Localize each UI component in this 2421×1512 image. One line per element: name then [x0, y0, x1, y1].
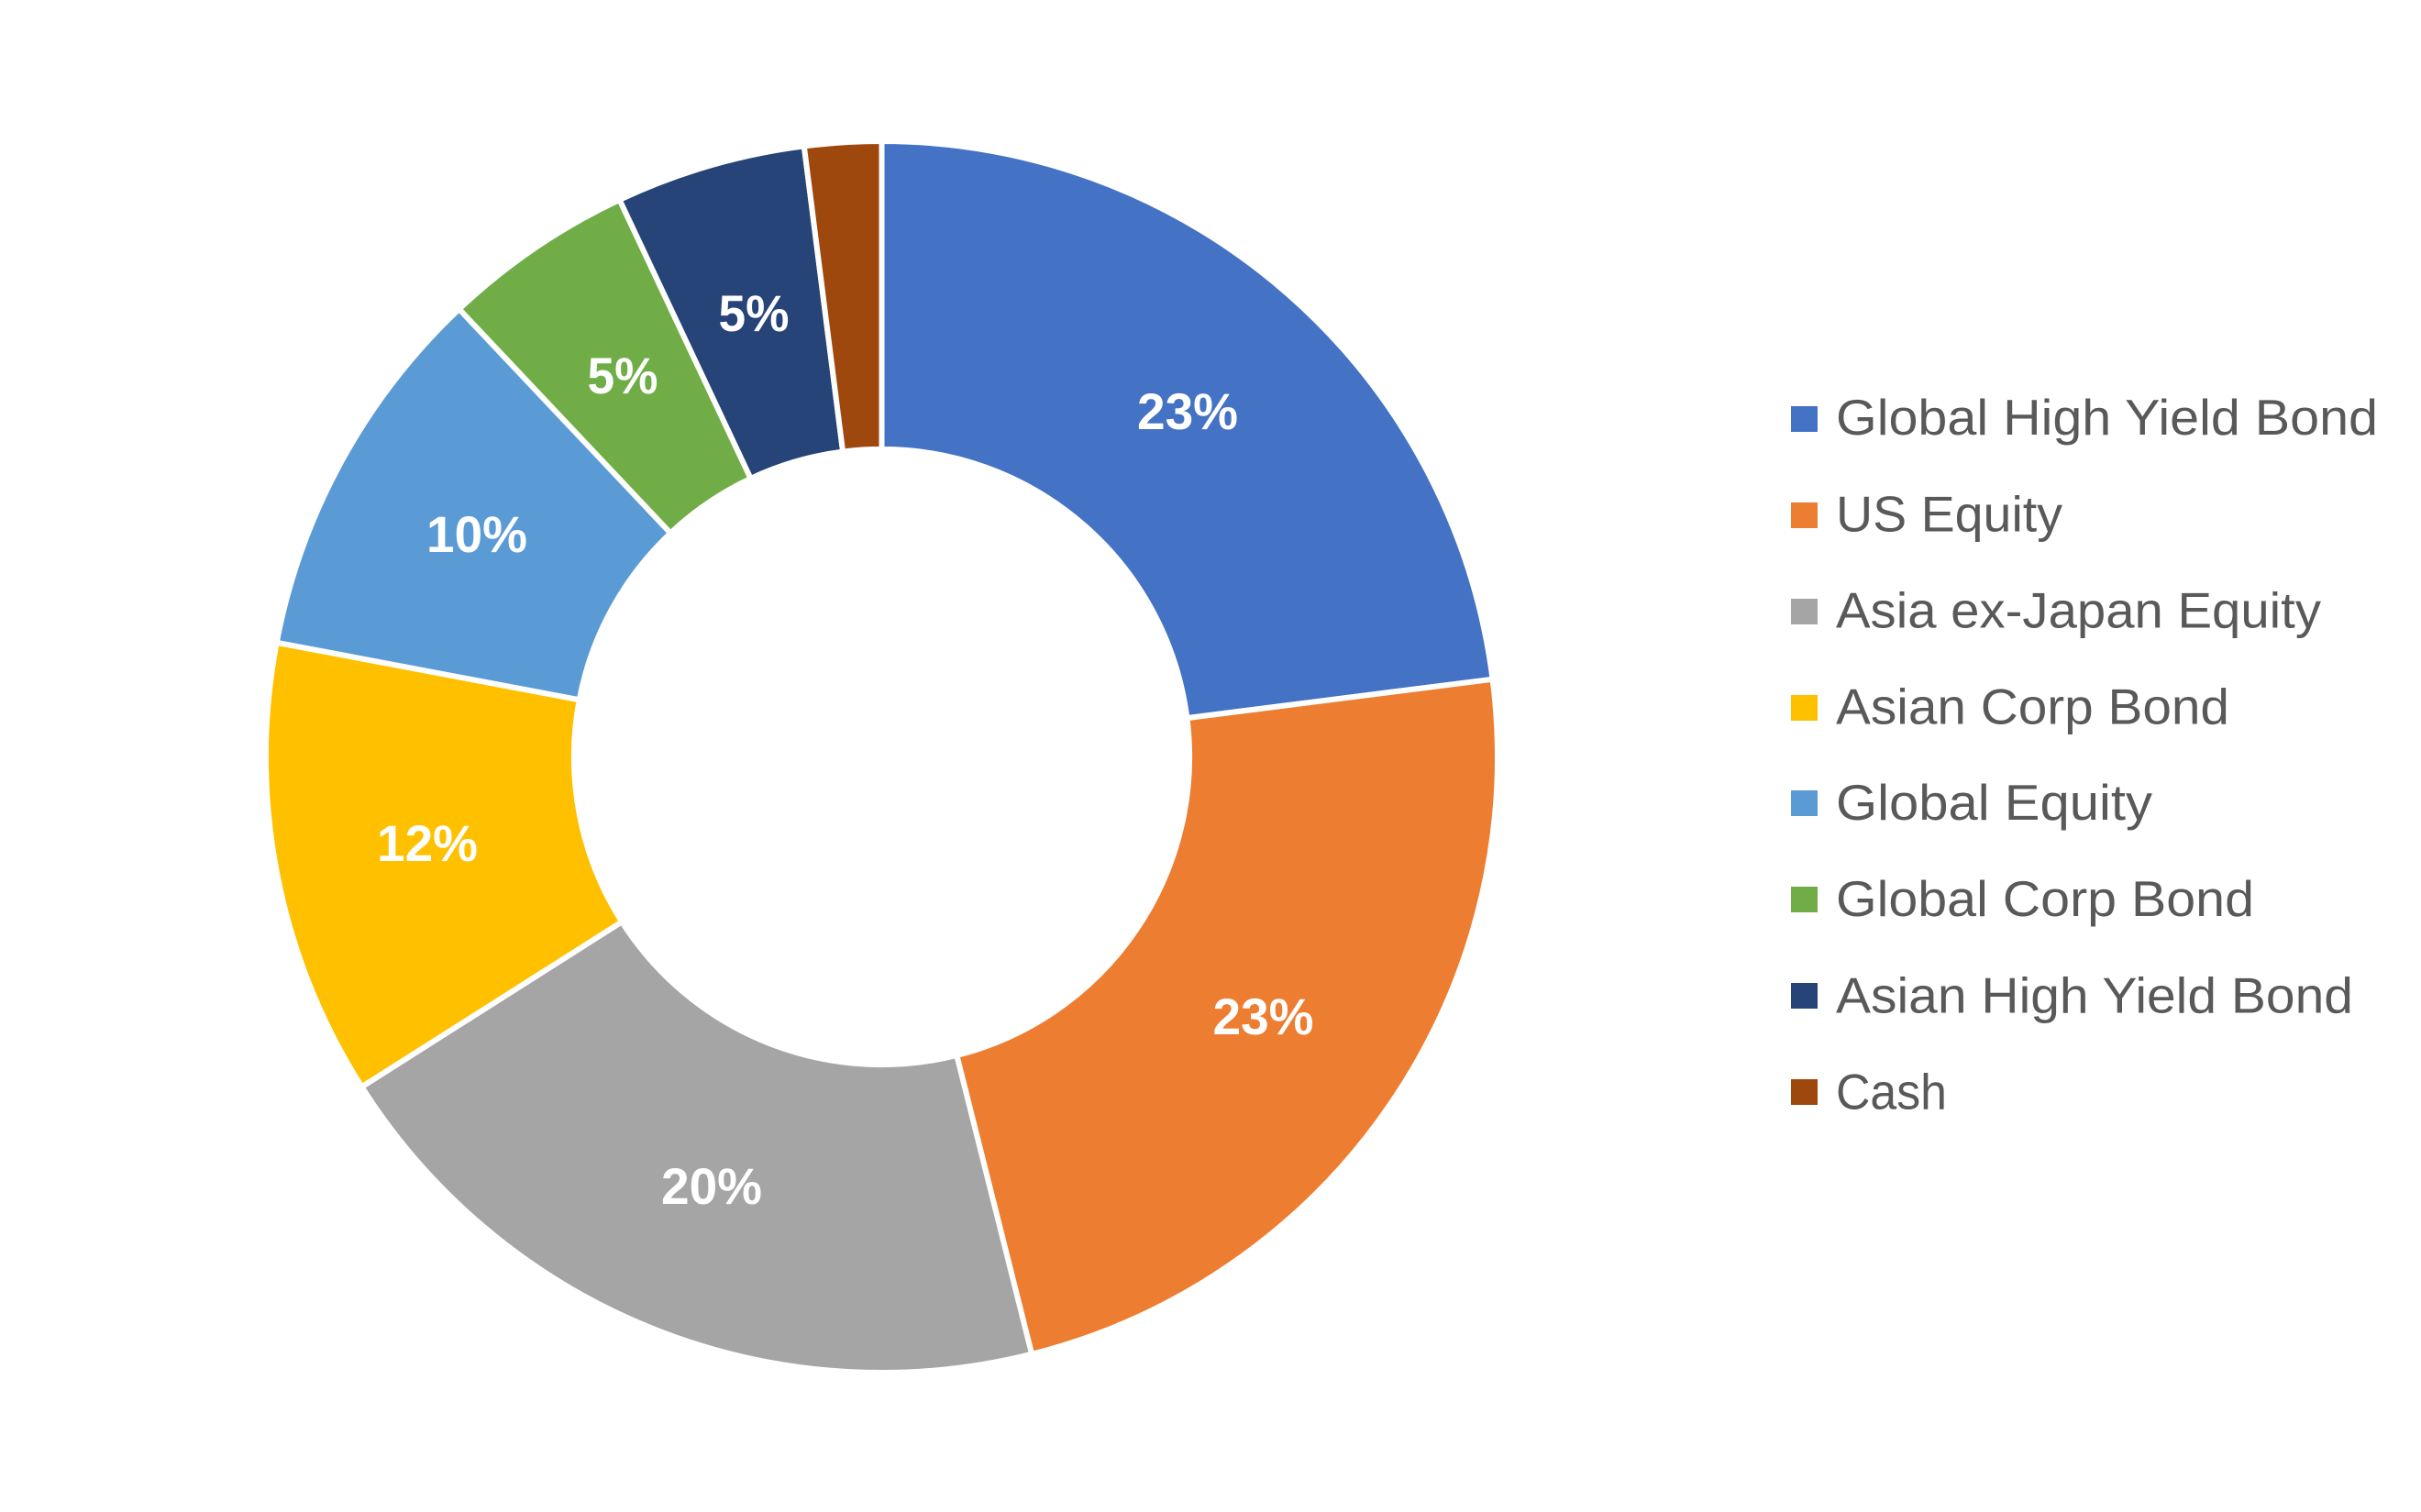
legend item: Asian High Yield Bond: Asian High Yield Bond	[1836, 966, 2353, 1023]
slice: Global High Yield Bond	[882, 141, 1493, 718]
slice: Asian Corp Bond	[266, 643, 622, 1087]
legend item: US Equity: US Equity	[1836, 486, 2063, 543]
legend item: Global High Yield Bond: Global High Yield Bond	[1836, 389, 2378, 446]
slice: Global Corp Bond	[459, 200, 751, 533]
label: US Equity 23%: 23%	[1212, 988, 1313, 1045]
slice: Asian High Yield Bond	[620, 146, 843, 479]
legend item: Cash: Cash	[1836, 1064, 1947, 1120]
label: Asian High Yield Bond 5%: 5%	[719, 284, 789, 342]
label: Global Equity 10%: 10%	[426, 505, 527, 563]
label: Asia ex-Japan Equity 20%: 20%	[661, 1157, 762, 1215]
slice: Global Equity	[277, 309, 670, 700]
slice: US Equity	[956, 679, 1498, 1354]
legend item: Global Corp Bond: Global Corp Bond	[1836, 870, 2254, 927]
slice: Asia ex-Japan Equity	[361, 922, 1032, 1373]
label: Global High Yield Bond 23%: 23%	[1137, 382, 1238, 440]
legend item: Global Equity: Global Equity	[1836, 774, 2153, 831]
legend item: Asia ex-Japan Equity: Asia ex-Japan Equity	[1836, 581, 2321, 638]
legend item: Cash	[1791, 1064, 1947, 1120]
data labels	[377, 284, 1313, 1215]
legend	[1791, 389, 2378, 1120]
legend item: Asian Corp Bond: Asian Corp Bond	[1836, 679, 2229, 735]
donut chart	[266, 141, 1498, 1373]
label: Global Corp Bond 5%: 5%	[587, 347, 658, 404]
slice: Cash	[804, 141, 882, 452]
label: Asian Corp Bond 12%: 12%	[377, 814, 478, 872]
